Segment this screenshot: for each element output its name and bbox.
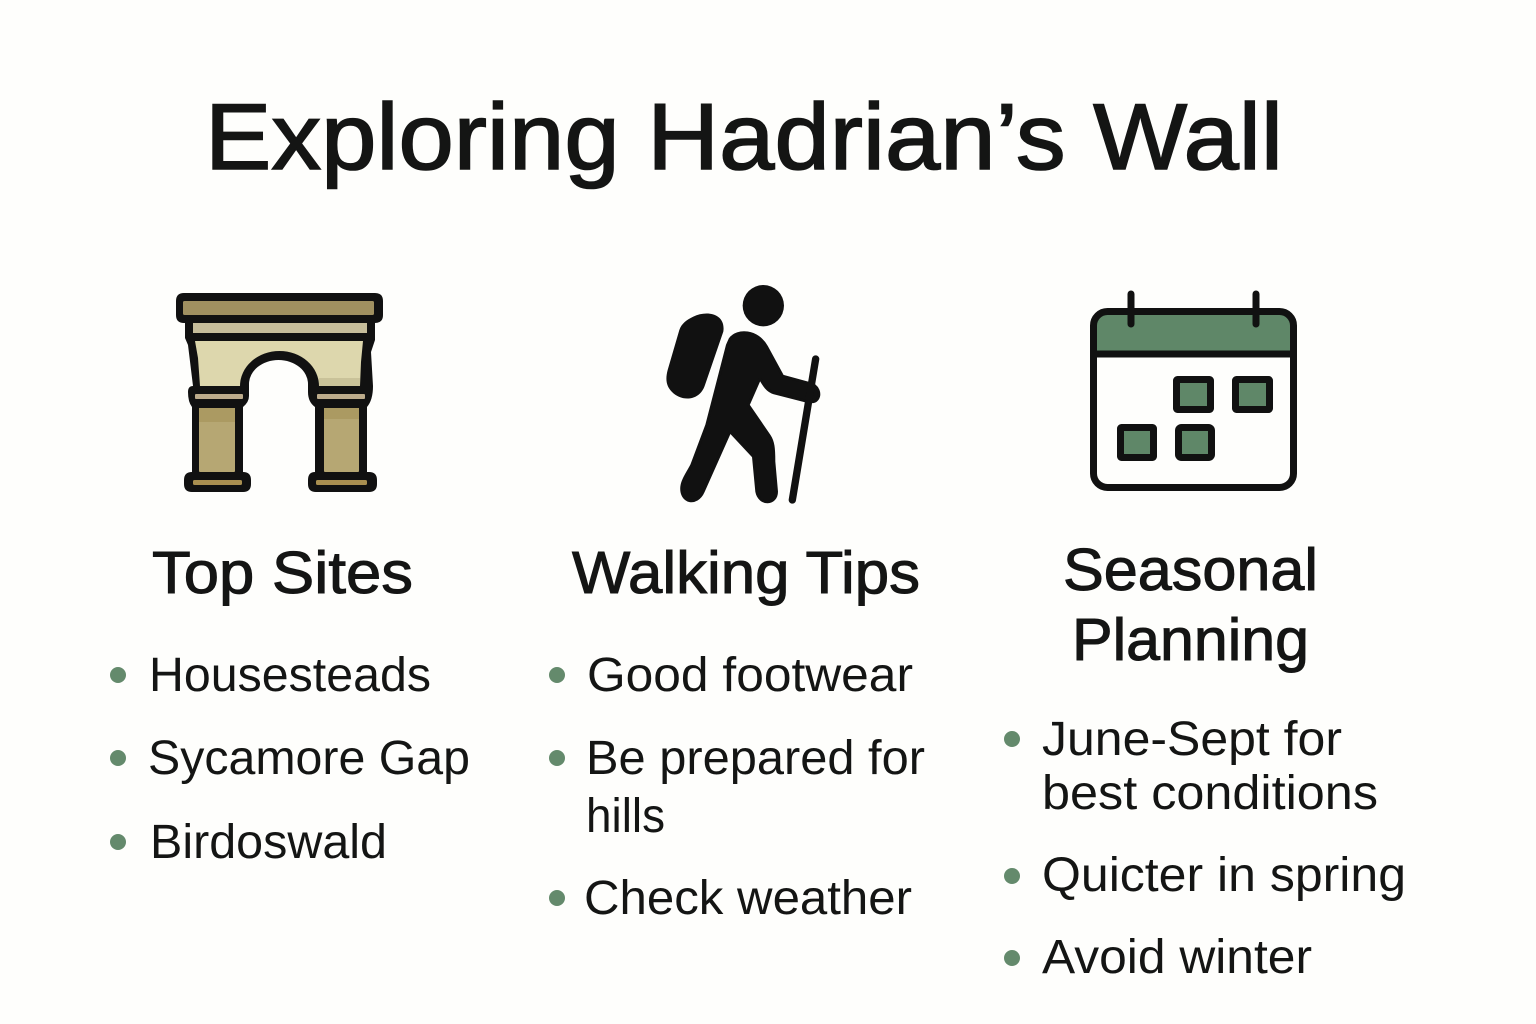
list: seasonal planning: best conditions	[1042, 767, 1378, 820]
heading: seasonal planning: Seasonal	[1063, 537, 1318, 603]
panel: seasonal planning	[1004, 294, 1406, 984]
list: top sites	[110, 649, 470, 869]
list: walking tips	[549, 649, 925, 925]
icon: hiker	[666, 285, 819, 502]
list: top sites: Sycamore Gap	[148, 732, 470, 785]
list: walking tips: Check weather	[584, 872, 912, 925]
list: top sites: Housesteads	[149, 649, 431, 702]
list: walking tips: hills	[586, 790, 665, 843]
list: seasonal planning	[1004, 713, 1406, 984]
list: seasonal planning: Avoid winter	[1042, 931, 1312, 984]
heading: seasonal planning: Planning	[1072, 607, 1309, 673]
panel: top sites	[110, 293, 470, 869]
heading: walking tips: Walking Tips	[572, 540, 920, 606]
heading: seasonal planning	[1063, 537, 1318, 673]
heading: top sites: Top Sites	[152, 540, 413, 606]
icon: calendar	[1092, 294, 1296, 488]
icon: roman arch	[176, 293, 383, 492]
title: Exploring Hadrian’s Wall	[205, 84, 1283, 189]
list: seasonal planning: Quicter in spring	[1042, 849, 1406, 902]
list: top sites: Birdoswald	[150, 816, 387, 869]
panel: walking tips	[549, 285, 925, 925]
list: seasonal planning: June-Sept for	[1042, 713, 1342, 766]
list: walking tips: Be prepared for	[586, 732, 925, 785]
list: walking tips: Good footwear	[587, 649, 913, 702]
